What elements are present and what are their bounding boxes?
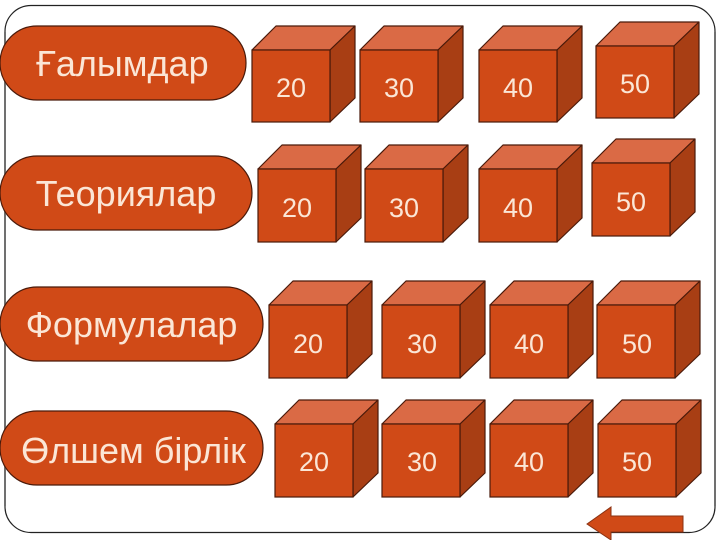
- pill: Теориялар: Теориялар: [36, 173, 216, 214]
- cube: row 4, 50: [598, 400, 701, 497]
- pill: Теориялар: [0, 156, 252, 230]
- cube: row 1, 50: 50: [620, 69, 650, 99]
- cube: row 1, 30: 30: [384, 73, 414, 103]
- pill: Формулалар: [0, 287, 263, 361]
- cube: row 2, 30: [365, 145, 468, 242]
- cube: row 4, 20: [275, 400, 378, 497]
- pill: Формулалар: Формулалар: [26, 304, 237, 345]
- cube: row 3, 30: [382, 281, 485, 378]
- cube: row 1, 40: 40: [503, 73, 533, 103]
- cube: row 2, 50: 50: [616, 187, 646, 217]
- cube: row 2, 40: [479, 145, 582, 242]
- cube: row 3, 50: [597, 281, 700, 378]
- cube: row 2, 30: 30: [389, 193, 419, 223]
- cube: row 4, 50: 50: [622, 447, 652, 477]
- cube: row 2, 50: [592, 139, 695, 236]
- cube: row 3, 40: [490, 281, 593, 378]
- cube: row 3, 20: [269, 281, 372, 378]
- cube: row 2, 20: [258, 145, 361, 242]
- pill: Ғалымдар: [0, 26, 246, 100]
- cube: row 4, 30: 30: [407, 447, 437, 477]
- cube: row 1, 40: [479, 26, 582, 122]
- pill: Өлшем бірлік: Өлшем бірлік: [21, 430, 246, 471]
- pill: Ғалымдар: Ғалымдар: [35, 43, 209, 84]
- cube: row 3, 20: 20: [293, 329, 323, 359]
- cube: row 4, 20: 20: [299, 447, 329, 477]
- cube: row 1, 50: [596, 22, 699, 118]
- cube: row 2, 40: 40: [503, 193, 533, 223]
- cube: row 3, 40: 40: [514, 329, 544, 359]
- cube: row 1, 20: [252, 26, 355, 122]
- pill: Өлшем бірлік: [0, 411, 263, 485]
- arrow: back: [587, 507, 683, 540]
- cube: row 2, 20: 20: [282, 193, 312, 223]
- cube: row 3, 30: 30: [407, 329, 437, 359]
- cube: row 4, 40: 40: [514, 447, 544, 477]
- cube: row 3, 50: 50: [622, 329, 652, 359]
- cube: row 1, 30: [360, 26, 463, 122]
- cube: row 1, 20: 20: [276, 73, 306, 103]
- cube: row 4, 30: [382, 400, 485, 497]
- cube: row 4, 40: [490, 400, 593, 497]
